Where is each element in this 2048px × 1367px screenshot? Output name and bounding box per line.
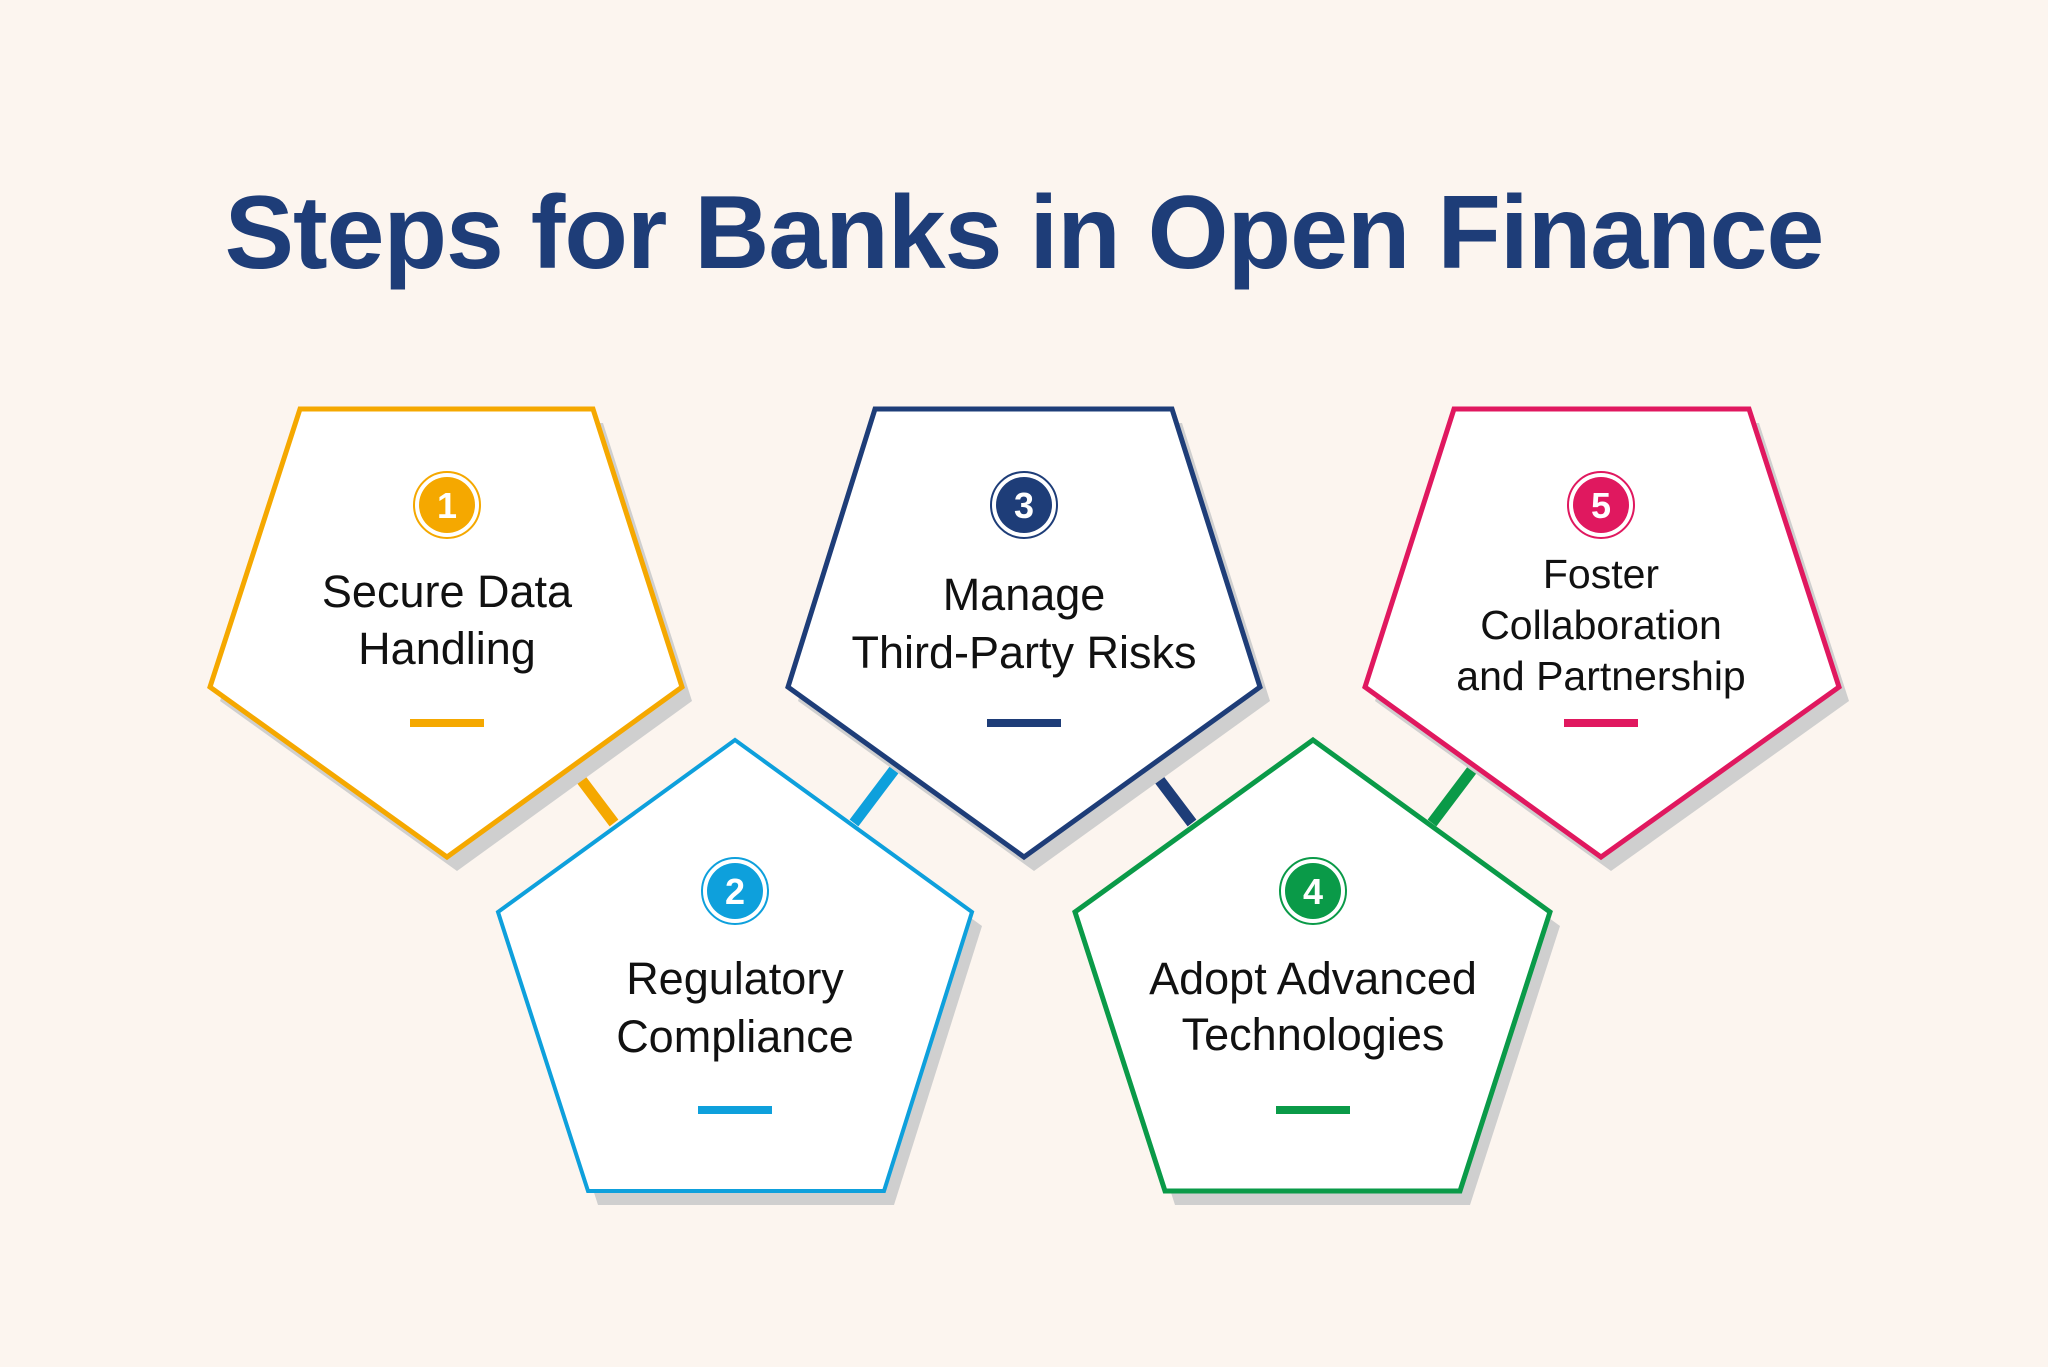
step 5: and Partnership xyxy=(1456,653,1746,699)
step 2: Compliance xyxy=(616,1011,854,1062)
step 2: Regulatory xyxy=(626,953,844,1004)
step 3 xyxy=(788,409,1270,871)
badge 1 xyxy=(414,472,480,538)
badge 1: 1 xyxy=(437,485,457,526)
step 4: Technologies xyxy=(1182,1009,1444,1060)
title: Steps for Banks in Open Finance xyxy=(225,175,1823,291)
step 5 xyxy=(1365,409,1849,871)
step 2 xyxy=(498,740,982,1205)
step 4 xyxy=(1075,740,1560,1205)
step 3: Third-Party Risks xyxy=(851,627,1197,678)
step 5: Collaboration xyxy=(1480,602,1722,648)
step 3: 3 xyxy=(1014,485,1034,526)
step 3: Manage xyxy=(943,569,1105,620)
step 1: Handling xyxy=(358,623,536,674)
step 4: 4 xyxy=(1303,871,1323,912)
step 4: Adopt Advanced xyxy=(1149,953,1477,1004)
step 1 xyxy=(210,409,692,871)
step 5: 5 xyxy=(1591,485,1611,526)
step 5: Foster xyxy=(1543,551,1659,597)
connectors xyxy=(574,770,1472,823)
step 2: 2 xyxy=(725,871,745,912)
step 1: Secure Data xyxy=(322,566,573,617)
